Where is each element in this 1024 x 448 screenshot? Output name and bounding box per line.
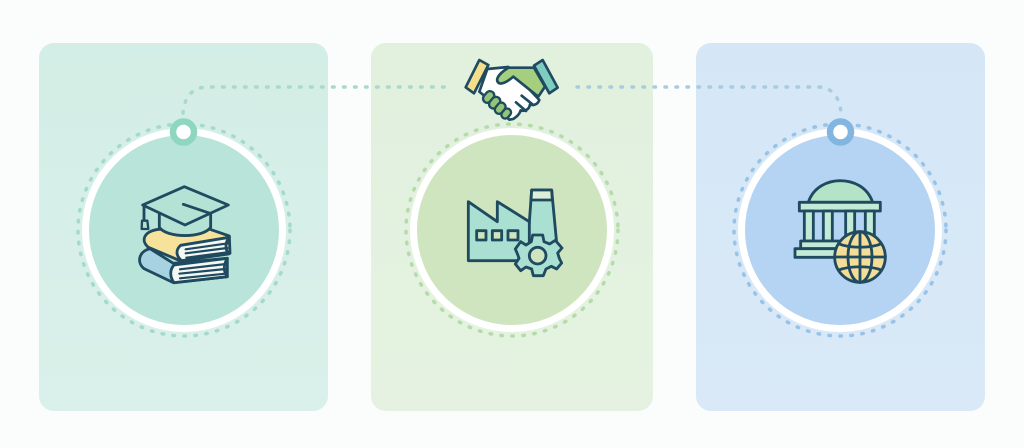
yellow cuff: [466, 60, 488, 93]
connector: handshake to government: [577, 87, 841, 113]
cap base: [159, 213, 211, 236]
dotted ring: industry: [406, 124, 618, 336]
upper yellow book: [144, 229, 230, 261]
icon: factory and gear: [468, 190, 562, 276]
entablature: [799, 202, 880, 211]
dotted ring: education: [78, 124, 290, 336]
connector: education to handshake: [183, 87, 450, 113]
node: education: [173, 122, 194, 142]
dome: [808, 181, 873, 202]
medallion: government: [742, 132, 938, 328]
fingers: [481, 89, 513, 120]
teal cuff: [534, 60, 558, 93]
steps: [801, 241, 851, 249]
gear: [515, 235, 562, 276]
icon: graduation cap on books: [140, 187, 230, 283]
cap button line: [183, 204, 210, 213]
panel: government: [696, 43, 985, 411]
panel: education: [39, 43, 328, 411]
globe: [835, 232, 885, 282]
medallion: education: [86, 132, 282, 328]
panel: industry: [371, 43, 653, 411]
green hand: [497, 68, 545, 97]
node: government: [830, 122, 851, 142]
tassel: [140, 206, 148, 220]
white hand: [479, 67, 539, 120]
chimney: [527, 190, 557, 250]
icon: institution and globe: [795, 181, 885, 282]
lower blue book: [140, 249, 227, 283]
dotted ring: government: [734, 124, 946, 336]
mortarboard: [143, 187, 228, 225]
icon: handshake: [466, 60, 558, 120]
factory body: [468, 202, 529, 261]
medallion: industry: [414, 132, 610, 328]
windows: [477, 231, 486, 240]
columns: [804, 211, 813, 241]
